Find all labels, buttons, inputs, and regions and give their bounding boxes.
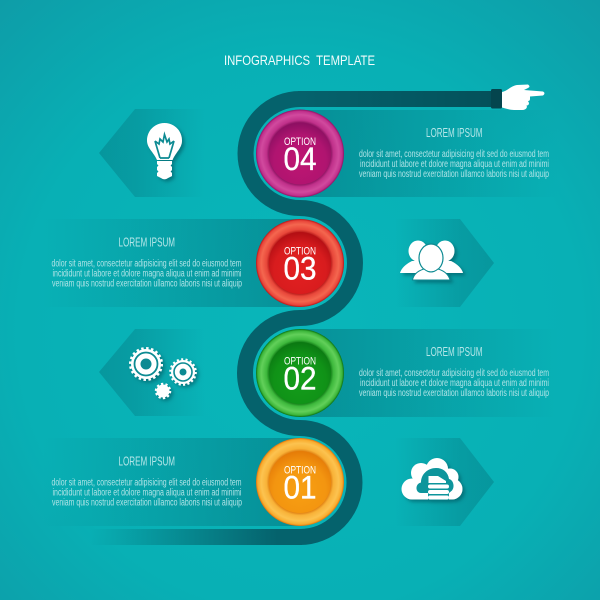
text block: option 04 [359,126,549,180]
text block: option 02 [359,345,549,399]
icon: cloud database [402,458,462,500]
icon: pointing hand with cuff [491,84,544,110]
circle: option 02 [256,329,344,417]
circle: option 03 [256,219,344,307]
label: option 02: OPTION [284,356,316,368]
icon: light bulb [147,123,182,179]
arrow: gears pointer [99,329,205,416]
label: option 03: OPTION [284,246,316,258]
arrow: people pointer [395,219,494,307]
text block: option 03: LOREM IPSUM [118,236,175,250]
panel: option 03 banner [42,219,300,307]
number 03: 03 [284,250,316,286]
text block: option 04: LOREM IPSUM [426,126,482,140]
panel: option 01 banner [42,438,300,526]
icon: gears [130,348,196,398]
label: option 01: OPTION [284,464,316,476]
winding ribbon [90,99,492,537]
text block: option 03: dolor sit amet, consectetur adipisicing elit sed do eiusmod tem [52,258,242,270]
text block: option 03: incididunt ut labore et dolore magna aliqua ut enim ad minimi [52,268,242,280]
icon: group of people [400,240,463,280]
panel: option 02 banner [300,329,558,417]
label: option 04: OPTION [284,136,316,148]
circle: option 04 [256,110,344,198]
text block: option 01 [52,454,242,508]
ribbon top run to the hand [298,91,492,107]
number 01: 01 [284,470,316,506]
text block: option 01: incididunt ut labore et dolore magna aliqua ut enim ad minimi [52,488,242,498]
arrow: cloud pointer [395,438,494,526]
text block: option 02: LOREM IPSUM [426,345,482,359]
text block: option 01: dolor sit amet, consectetur adipisicing elit sed do eiusmod tem [52,478,242,488]
number 04: 04 [284,141,316,177]
number 02: 02 [284,360,316,396]
circle: option 01 [256,438,344,526]
text block: option 03: veniam quis nostrud exercitation ullamco laboris nisi ut aliquip [52,278,242,290]
title: INFOGRAPHICS TEMPLATE [224,52,375,68]
panel: option 04 banner [300,110,558,197]
text block: option 03 [52,236,242,290]
text block: option 01: LOREM IPSUM [118,454,175,468]
ribbon fading tail [90,529,302,545]
text block: option 01: veniam quis nostrud exercitation ullamco laboris nisi ut aliquip [52,498,242,508]
arrow: bulb pointer [99,109,205,197]
